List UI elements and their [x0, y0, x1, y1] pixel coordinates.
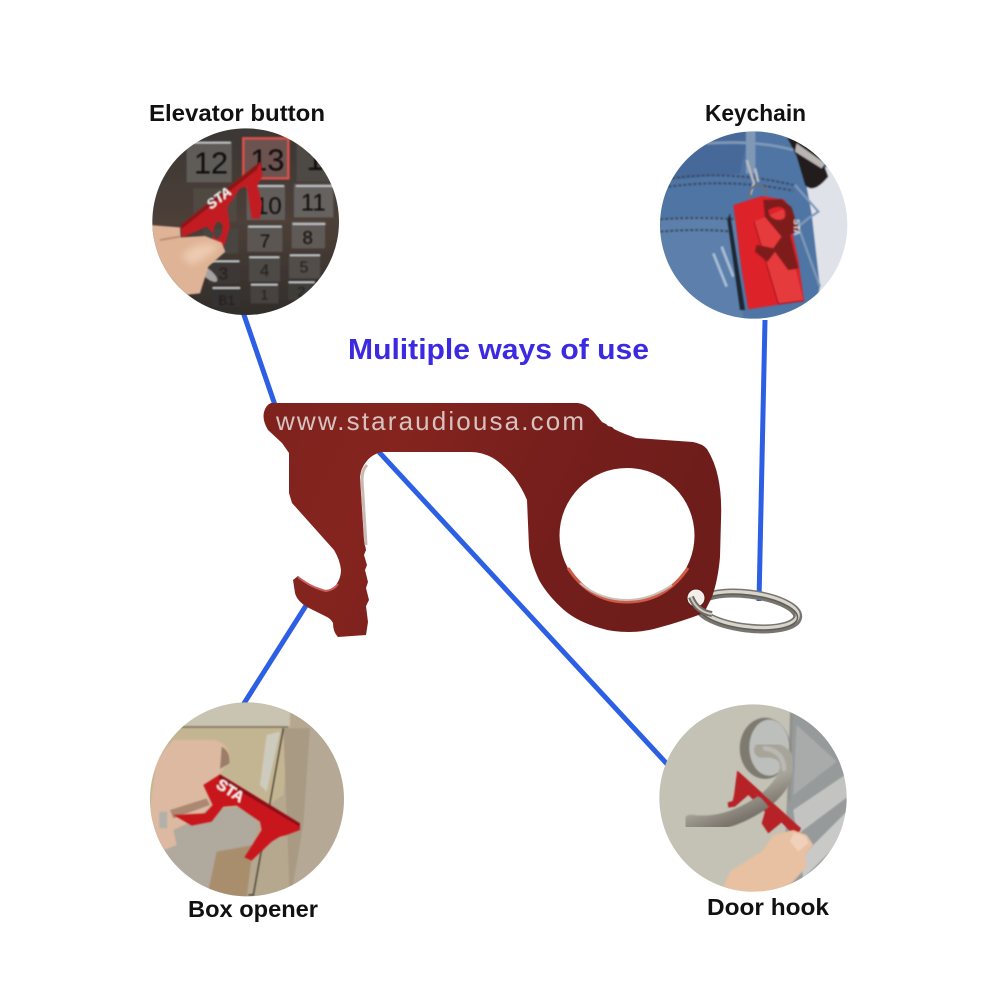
- hand: [150, 740, 230, 852]
- photo: elevator button: [150, 127, 343, 317]
- red tool edge over lever: [736, 771, 801, 836]
- button numbers: 8: [302, 227, 313, 248]
- red tool: [173, 774, 300, 861]
- button numbers: 3: [219, 263, 228, 283]
- button numbers: 7: [260, 230, 270, 251]
- red tool: STA: [213, 776, 247, 806]
- button numbers: 11: [301, 190, 326, 217]
- button numbers: [194, 143, 326, 308]
- main product: contactless key tool: [264, 403, 800, 637]
- button numbers: 5: [300, 260, 309, 277]
- button numbers: 10: [255, 193, 282, 220]
- photo: keychain: [657, 127, 853, 323]
- red tool on pouch: [755, 199, 802, 270]
- connector: keychain: [759, 320, 765, 601]
- red tool on pouch: STA: [792, 219, 802, 236]
- grommet: [687, 589, 705, 607]
- photo: door hook: [657, 702, 853, 895]
- connector: elevator button: [243, 312, 275, 405]
- photo: box opener: [147, 698, 350, 902]
- heading: elevator button: Elevator button: [149, 100, 325, 126]
- connector: door hook: [379, 452, 667, 764]
- button numbers: B1: [218, 292, 235, 308]
- button numbers: 13: [250, 144, 284, 178]
- connector: box opener: [243, 604, 307, 705]
- red tool: [728, 771, 801, 836]
- heading: keychain: Keychain: [705, 100, 806, 126]
- hand: [723, 830, 813, 895]
- door lever: [691, 748, 788, 823]
- button numbers: 1: [260, 286, 268, 302]
- title: Mulitiple ways of use: [348, 334, 649, 366]
- bevel highlights: [362, 465, 367, 545]
- red tool: STA: [203, 183, 234, 212]
- button numbers: 1: [306, 143, 324, 177]
- key ring: [696, 587, 800, 635]
- red tool: [181, 161, 263, 251]
- button numbers: 12: [194, 146, 228, 180]
- tool body: [264, 403, 721, 637]
- red pouch: [727, 196, 804, 310]
- button numbers: 2: [297, 284, 305, 300]
- engraved url: www.staraudiousa.com: [275, 406, 584, 436]
- heading: door hook: Door hook: [707, 894, 829, 920]
- heading: box opener: Box opener: [188, 896, 318, 922]
- hand: [150, 225, 225, 295]
- button numbers: 4: [260, 261, 269, 280]
